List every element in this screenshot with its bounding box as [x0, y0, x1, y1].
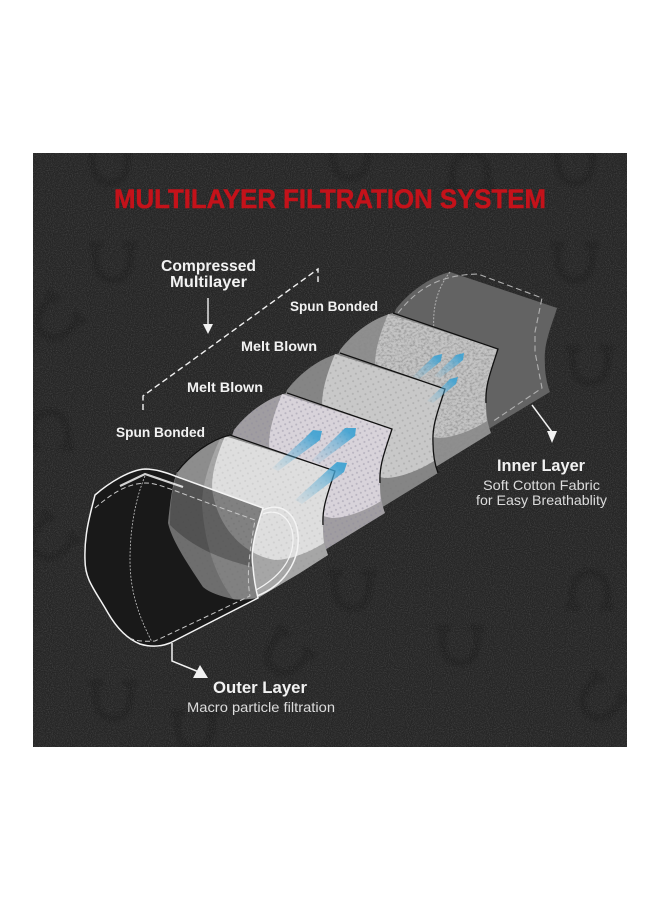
arrow: compressed multilayer pointer [203, 298, 213, 334]
layer: melt blown rear [338, 312, 499, 466]
icon: air flow arrows, dotted layer [272, 428, 356, 504]
ear loop [257, 507, 298, 596]
stitching [95, 483, 255, 641]
text: outer layer callout: Macro particle filtration [187, 699, 335, 715]
text: outer layer callout: Outer Layer [213, 678, 307, 697]
arrow: inner layer pointer [532, 405, 557, 443]
panel: textured dark background [20, 143, 629, 748]
title: MULTILAYER FILTRATION SYSTEM [114, 184, 546, 214]
label: spun bonded lower: Spun Bonded [116, 424, 205, 440]
nose wire [120, 474, 183, 487]
layer: melt blown front [278, 353, 445, 518]
text: inner layer callout: for Easy Breathablity [476, 492, 607, 508]
text: outer layer callout [187, 678, 335, 715]
text: inner layer callout [476, 456, 607, 508]
label: melt blown lower: Melt Blown [187, 379, 263, 395]
label: melt blown upper: Melt Blown [241, 338, 317, 354]
arrow: outer layer pointer [172, 643, 208, 678]
label: compressed multilayer [161, 258, 256, 291]
label: compressed multilayer: Compressed [161, 258, 256, 275]
mask: outer layer outline with ear loop [85, 469, 298, 646]
text: inner layer callout: Inner Layer [497, 456, 585, 475]
icon: air flow arrows, rear layer [412, 353, 464, 403]
bracket: dashed compressed span [143, 269, 318, 410]
label: compressed multilayer: Multilayer [170, 274, 247, 291]
label: spun bonded top: Spun Bonded [290, 298, 378, 314]
mask: outer layer black body [85, 469, 263, 646]
layer: front translucent sheet [168, 435, 335, 600]
layer: spun bonded dotted [225, 393, 392, 558]
text: inner layer callout: Soft Cotton Fabric [483, 477, 600, 493]
layer: inner cotton layer [387, 272, 557, 437]
